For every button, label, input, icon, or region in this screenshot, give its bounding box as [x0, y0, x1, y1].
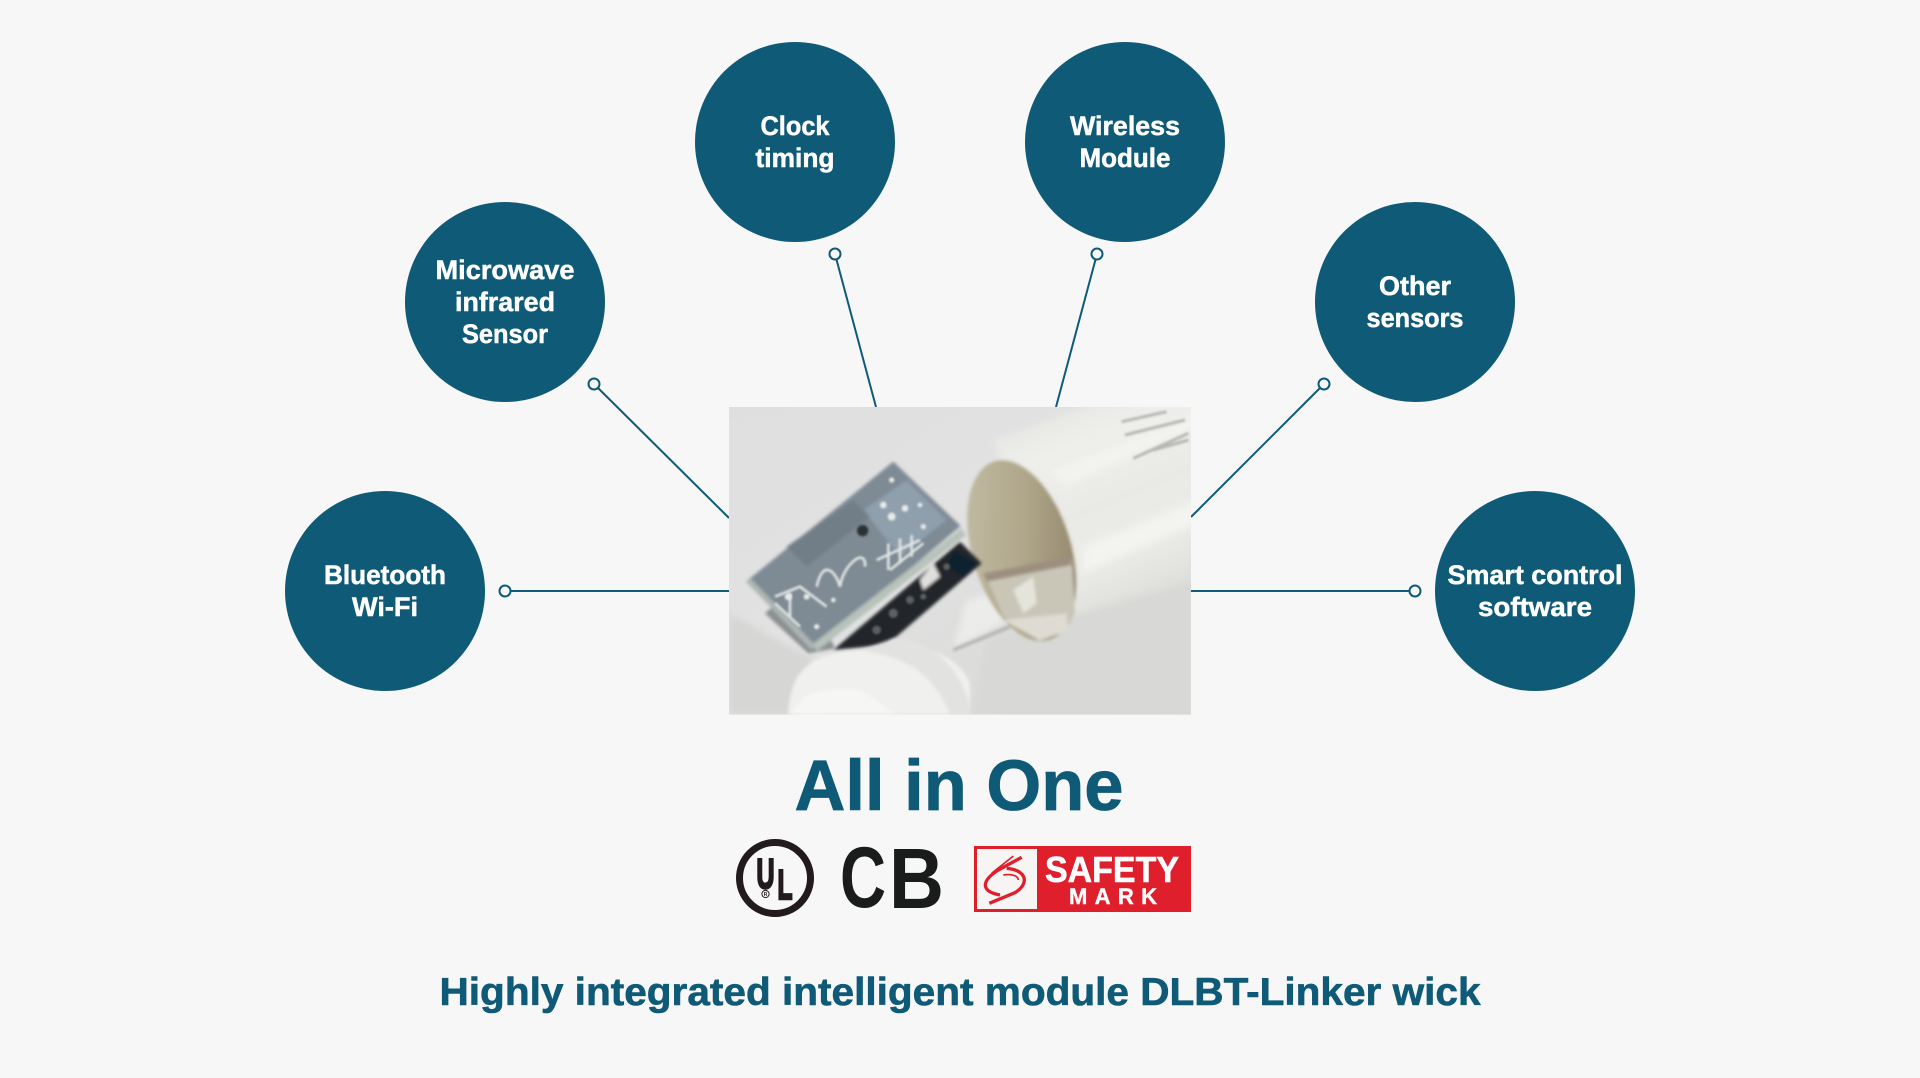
board traces — [775, 535, 923, 627]
node: Bluetooth Wi-Fi — [285, 491, 485, 691]
node: Clock timing: timing — [756, 143, 834, 173]
photo: module beside LED tube — [729, 397, 1197, 715]
logo: Safety Mark: MARK — [1069, 884, 1157, 909]
printed marking on tube — [1122, 412, 1188, 458]
node: Other sensors — [1315, 202, 1515, 402]
node: Microwave infrared Sensor: Sensor — [462, 319, 548, 349]
logo: UL: R — [764, 892, 768, 898]
node: Other sensors: sensors — [1366, 303, 1464, 333]
connector: Microwave infrared Sensor — [588, 378, 729, 518]
node: Microwave infrared Sensor: Microwave — [436, 255, 574, 285]
logo: Safety Mark — [974, 846, 1191, 912]
node: Wireless Module — [1025, 42, 1225, 242]
node: Microwave infrared Sensor — [405, 202, 605, 402]
title: All in One — [794, 747, 1124, 826]
node: Wireless Module: Module — [1080, 143, 1170, 173]
logo: UL: U — [756, 850, 774, 897]
node: Wireless Module: Wireless — [1070, 111, 1180, 141]
logo: CB: C — [840, 830, 886, 926]
node: Smart control software: software — [1478, 592, 1592, 622]
logo: Safety Mark: SAFETY — [1045, 849, 1179, 890]
caption: Highly integrated intelligent module DLBT-Linker wick — [440, 971, 1481, 1014]
logo: CB: B — [889, 832, 944, 927]
logo: UL: L — [778, 861, 792, 908]
node: Clock timing: Clock — [760, 111, 830, 141]
white end cap — [788, 638, 970, 715]
logo: UL — [740, 842, 810, 914]
node: Smart control software — [1435, 491, 1635, 691]
node: Other sensors: Other — [1379, 271, 1451, 301]
connector: Smart control software — [1191, 586, 1420, 596]
component specks — [872, 563, 950, 634]
connector: Other sensors — [1191, 378, 1330, 517]
connector: Bluetooth Wi-Fi — [500, 586, 729, 596]
circuit board — [746, 462, 982, 653]
tube opening — [952, 458, 1078, 652]
connector: Wireless Module — [1056, 248, 1102, 407]
node: Smart control software: Smart control — [1448, 560, 1622, 590]
node: Bluetooth Wi-Fi: Bluetooth — [324, 560, 446, 590]
node: Bluetooth Wi-Fi: Wi-Fi — [352, 592, 418, 622]
connector: Clock timing — [830, 248, 876, 407]
logo: CB — [840, 830, 944, 927]
node: Microwave infrared Sensor: infrared — [455, 287, 555, 317]
node: Clock timing — [695, 42, 895, 242]
